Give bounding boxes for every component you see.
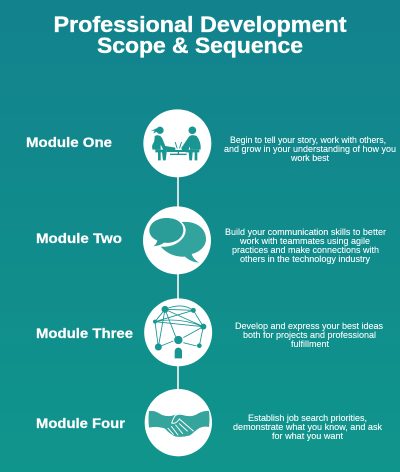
module two description: others in the technology industry bbox=[240, 254, 371, 264]
module two description: practices and make connections with bbox=[232, 245, 379, 255]
title bbox=[54, 12, 347, 58]
title: Professional Development bbox=[54, 12, 347, 37]
module three description: fulfillment bbox=[291, 339, 330, 349]
module two row bbox=[36, 206, 386, 274]
title: Scope & Sequence bbox=[97, 33, 303, 58]
module three description: Develop and express your best ideas bbox=[235, 321, 384, 331]
module one row bbox=[26, 109, 396, 177]
module four row bbox=[36, 389, 383, 456]
module three description bbox=[235, 321, 384, 349]
timeline connector bbox=[177, 170, 179, 395]
module four description: for what you want bbox=[272, 431, 344, 441]
module four label: Module Four bbox=[36, 415, 126, 431]
icon: two people at a table bbox=[143, 109, 211, 177]
icon: speech bubbles bbox=[143, 206, 211, 274]
module two description bbox=[225, 227, 386, 264]
module one description: and grow in your understanding of how you bbox=[224, 144, 396, 154]
left speech bubble bbox=[149, 218, 183, 246]
module one description: Begin to tell your story, work with others, bbox=[230, 135, 386, 145]
icon: handshake bbox=[145, 389, 212, 456]
module one description bbox=[224, 135, 396, 163]
module four description: Establish job search priorities, bbox=[248, 413, 367, 423]
right speech bubble bbox=[161, 222, 206, 263]
icon: network and person bbox=[144, 298, 212, 366]
module one description: work best bbox=[290, 153, 330, 163]
module four description: demonstrate what you know, and ask bbox=[233, 422, 383, 432]
module three row bbox=[36, 298, 384, 366]
module three label: Module Three bbox=[36, 325, 133, 341]
module three description: both for projects and professional bbox=[243, 330, 376, 340]
module four description bbox=[233, 413, 383, 441]
module one label: Module One bbox=[26, 134, 112, 150]
module two description: Build your communication skills to better bbox=[225, 227, 386, 237]
module two description: work with teammates using agile bbox=[239, 236, 370, 246]
module two label: Module Two bbox=[36, 230, 122, 246]
